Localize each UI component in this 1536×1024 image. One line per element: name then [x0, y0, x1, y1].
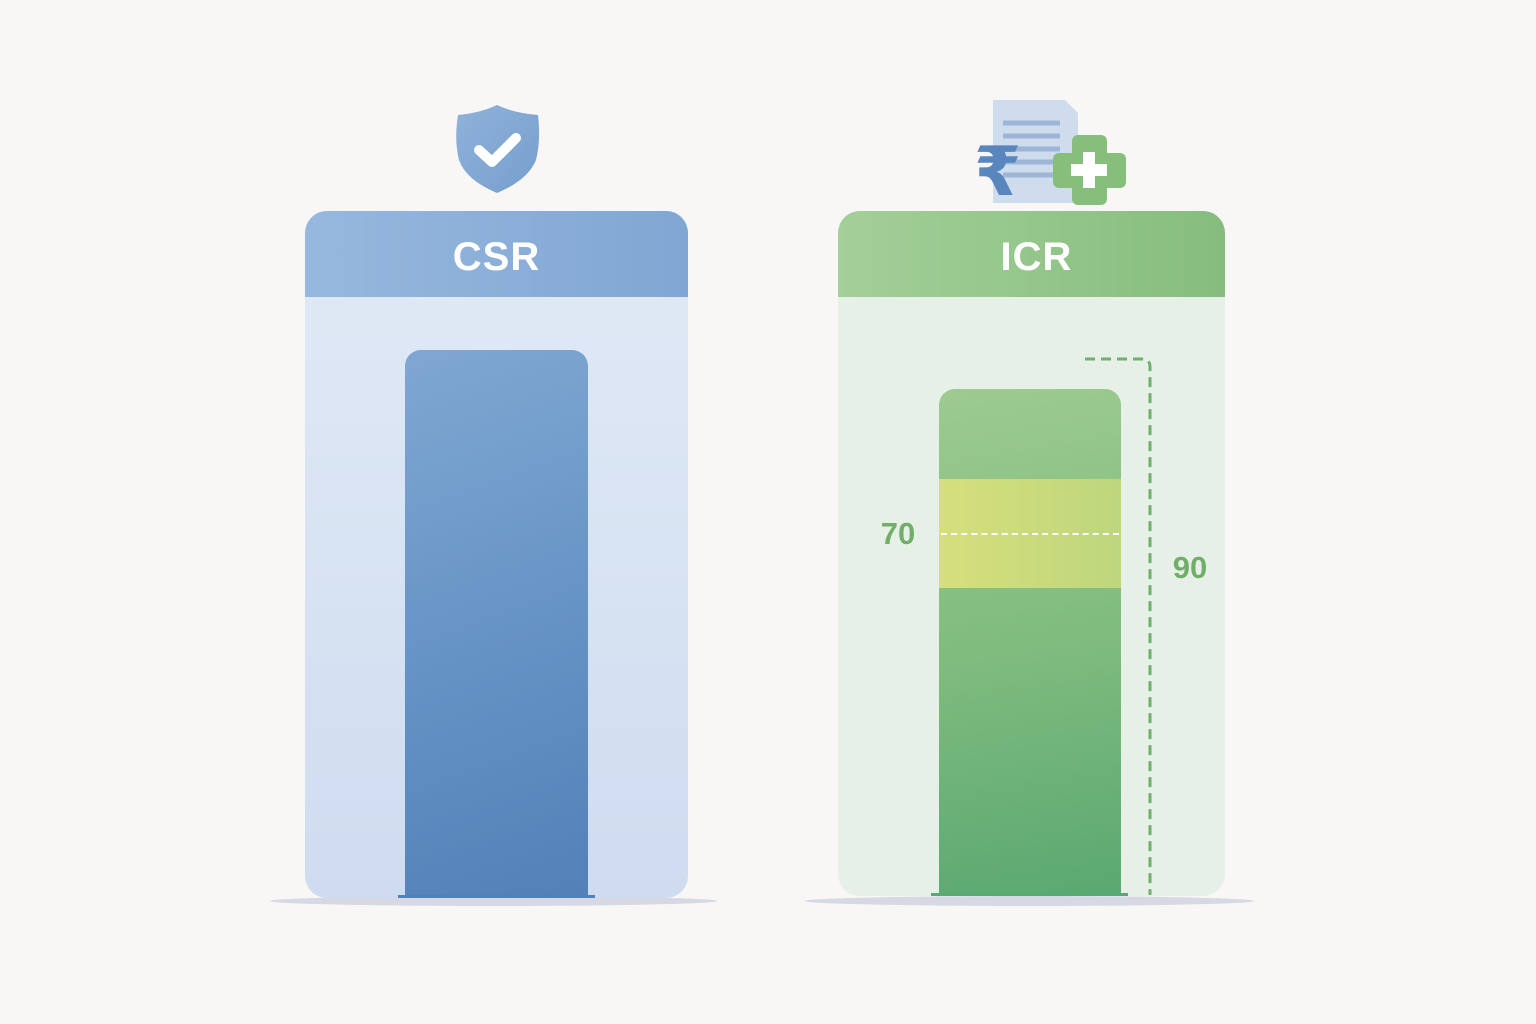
panel: ICR: [838, 211, 1225, 896]
label: 90: 90: [1173, 550, 1207, 585]
icon: document rupee medical: [974, 100, 1126, 210]
icon: shield check: [456, 105, 540, 193]
bar: ICR: [939, 389, 1121, 896]
bracket: 90: [1085, 358, 1152, 895]
dashed line: 70: [941, 533, 1119, 535]
bar: CSR: [405, 350, 588, 898]
icon: document rupee medical: ₹: [974, 134, 1021, 210]
band: 70 range: [939, 479, 1121, 588]
heading: ICR: [838, 211, 1225, 297]
heading: CSR: CSR: [453, 235, 540, 279]
shadow: CSR: [270, 896, 717, 906]
baseline: CSR: [398, 895, 595, 898]
panel: CSR: [305, 211, 688, 898]
shadow: ICR: [805, 896, 1254, 906]
label: 70: 70: [881, 516, 915, 551]
heading: CSR: [305, 211, 688, 297]
baseline: ICR: [931, 893, 1128, 896]
heading: ICR: ICR: [1001, 235, 1072, 279]
